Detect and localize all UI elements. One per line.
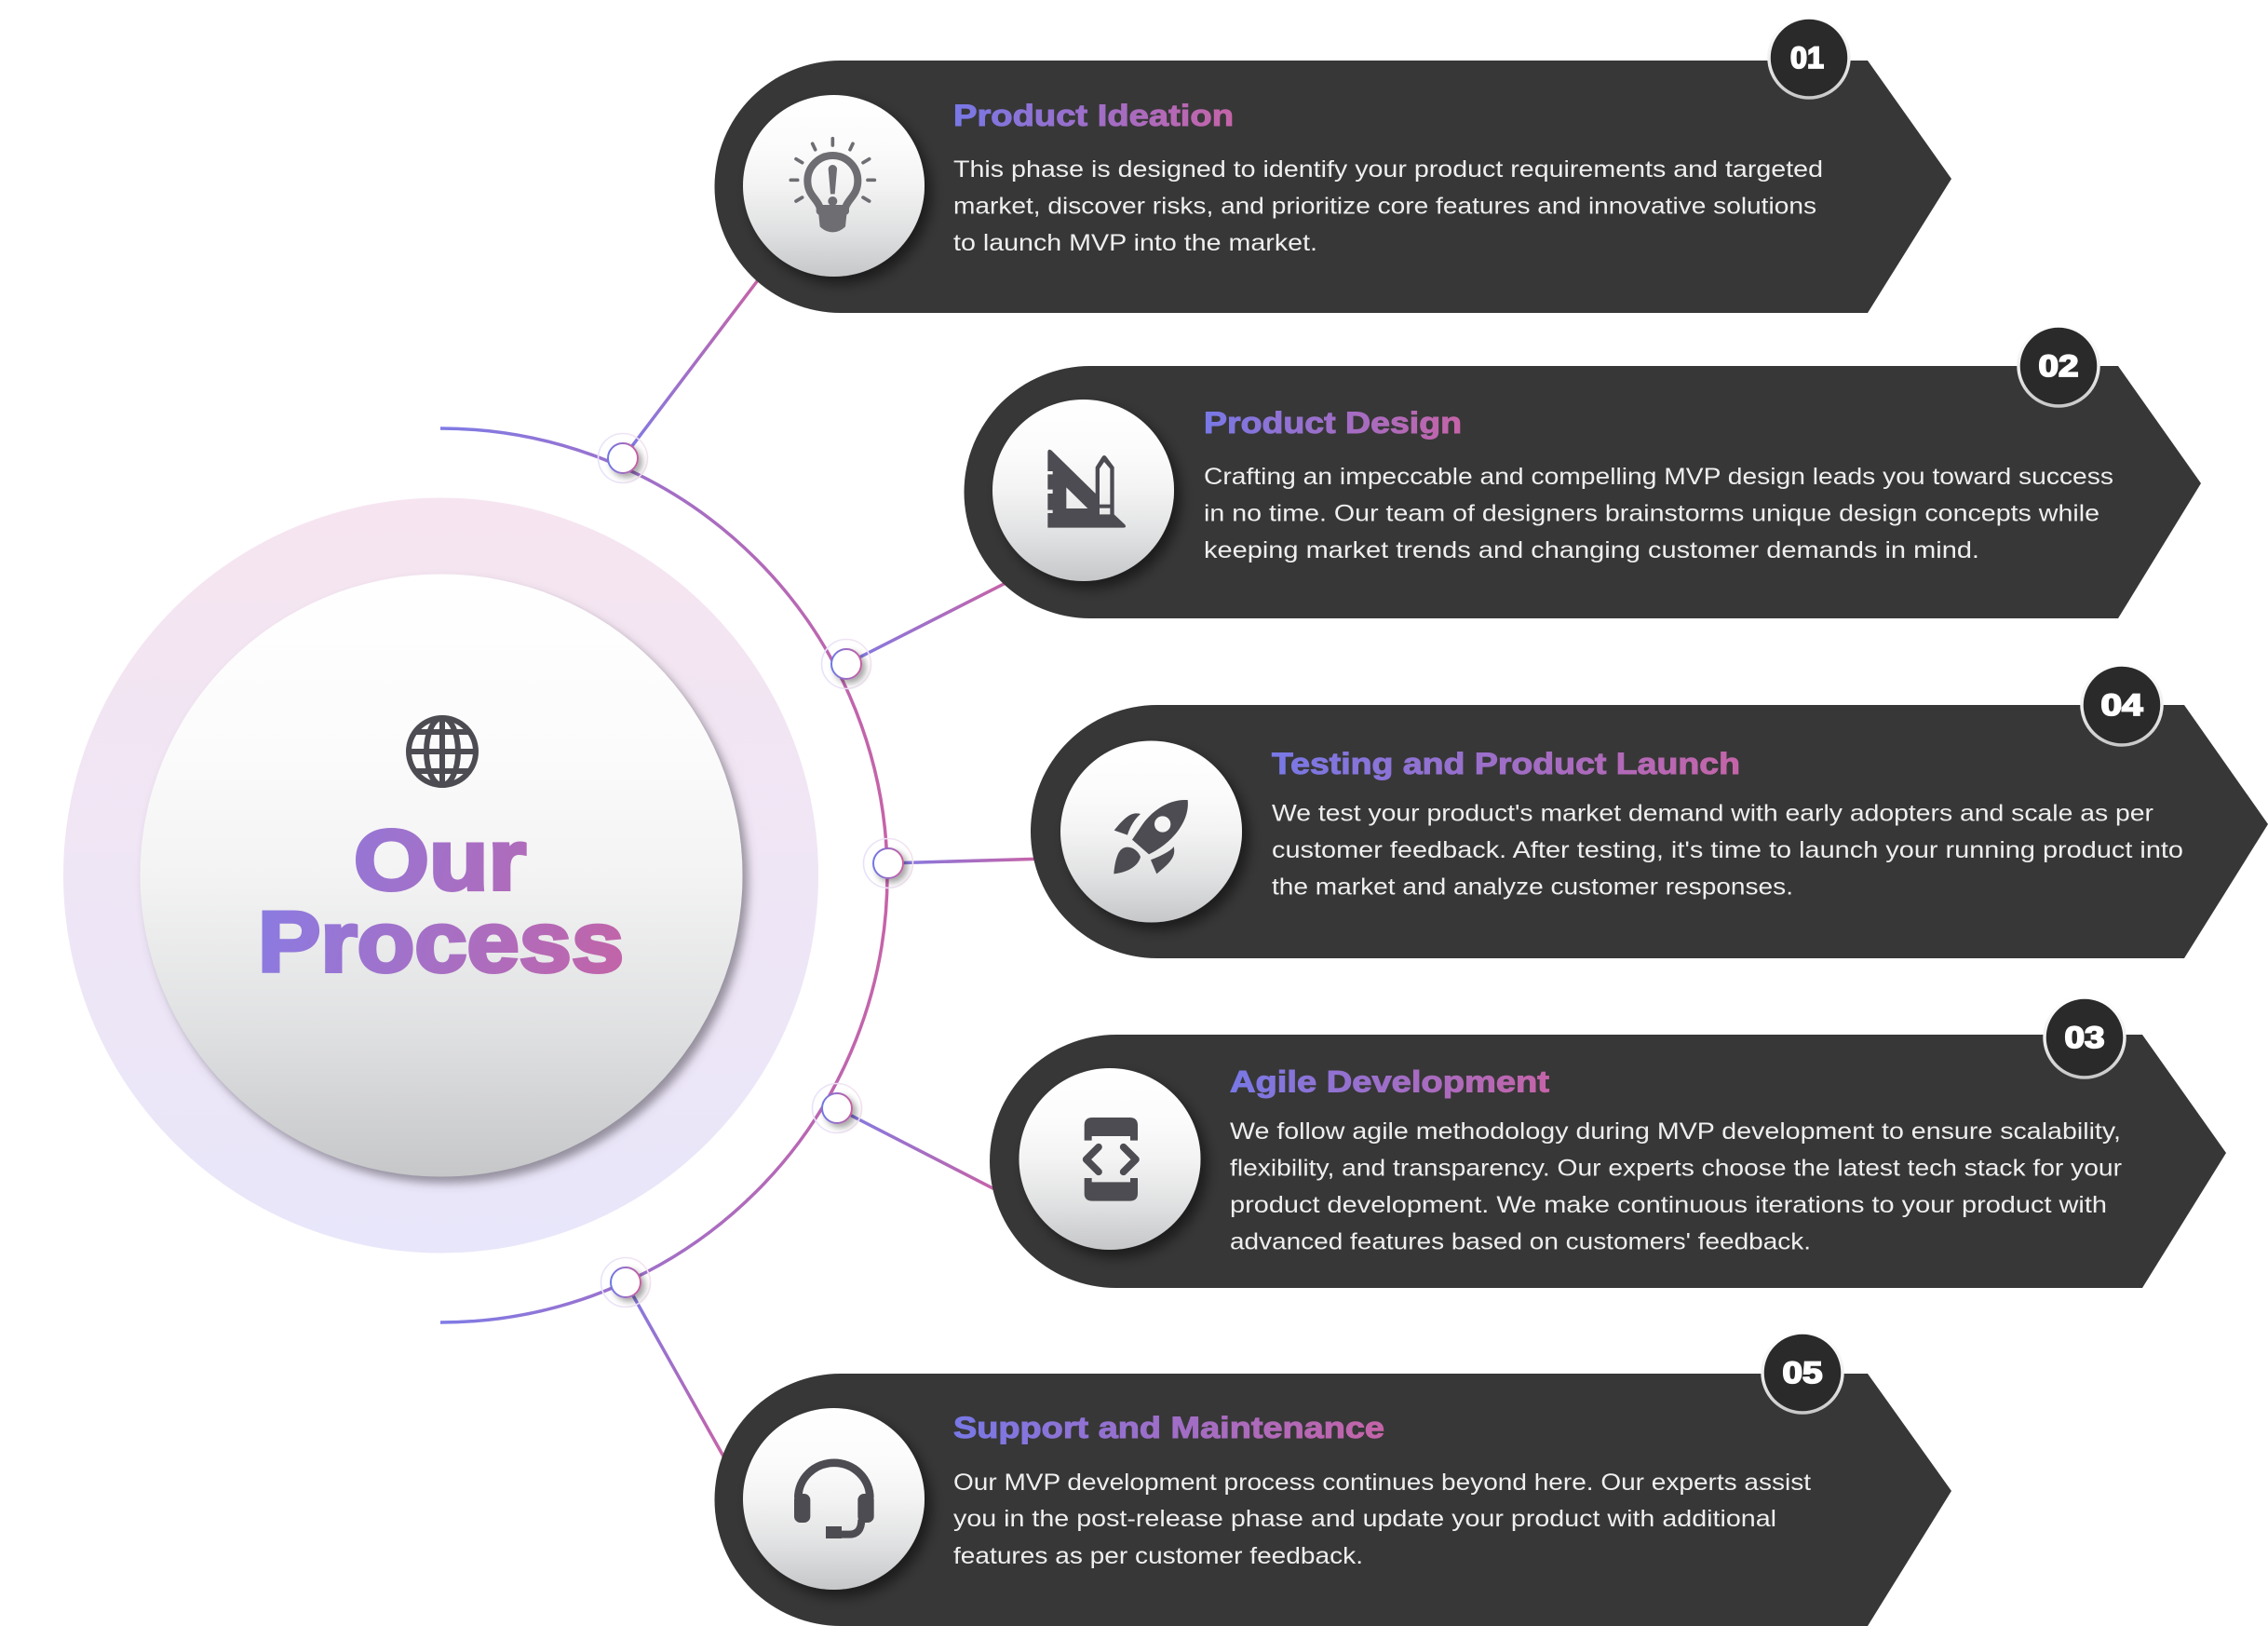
central circle: outer halo: [63, 497, 818, 1253]
heading: Our Process: [258, 813, 624, 990]
panel: Testing and Product Launch: [1031, 665, 2268, 958]
node 3: [864, 838, 912, 888]
description: product development. We make continuous iterations to your product with: [1230, 1192, 2107, 1218]
description: We test your product's market demand with early adopters and scale as per: [1272, 801, 2153, 827]
description: [953, 1470, 1811, 1569]
badge 03: 03: [2065, 1021, 2104, 1054]
icon: mobile code: [1085, 1118, 1138, 1201]
description: This phase is designed to identify your product requirements and targeted: [953, 156, 1823, 183]
title: Agile Development: [1230, 1065, 1549, 1099]
heading: Our Process: Our: [354, 813, 526, 908]
banner shape: [715, 61, 1951, 313]
connector: node 3 to Testing and Product Launch: [888, 859, 1047, 863]
description: in no time. Our team of designers brainstorms unique design concepts while: [1204, 501, 2099, 527]
badge 03: [2045, 997, 2125, 1077]
central circle: inner disc: [140, 574, 743, 1177]
icon disc: [743, 95, 925, 277]
icon: globe: [409, 718, 476, 785]
panel: Agile Development: [990, 997, 2226, 1288]
icon disc: [743, 1408, 925, 1590]
description: [1204, 464, 2113, 563]
banner shape: [1031, 705, 2268, 958]
description: flexibility, and transparency. Our experts choose the latest tech stack for your: [1230, 1155, 2122, 1181]
node 2: [821, 639, 871, 689]
banner shape: [990, 1035, 2226, 1288]
badge 02: 02: [2039, 349, 2078, 383]
description: [953, 156, 1823, 256]
timeline arc: [440, 428, 887, 1322]
badge 02: [2018, 326, 2099, 406]
node 5: [601, 1257, 650, 1308]
description: [1230, 1118, 2122, 1255]
icon disc: [992, 400, 1174, 581]
connector: node 2 to Product Design: [846, 578, 1015, 664]
node 1: [598, 434, 648, 482]
description: keeping market trends and changing customer demands in mind.: [1204, 537, 1979, 563]
badge 05: [1762, 1333, 1843, 1413]
icon: set square and pencil: [1047, 450, 1126, 528]
icon: headset: [794, 1463, 874, 1538]
icon: rocket: [1114, 800, 1188, 874]
description: features as per customer feedback.: [953, 1543, 1363, 1569]
node 4: [812, 1084, 862, 1132]
panel: Product Design: [965, 326, 2201, 618]
description: We follow agile methodology during MVP development to ensure scalability,: [1230, 1118, 2121, 1145]
heading: Our Process: Process: [258, 895, 624, 990]
badge 01: 01: [1790, 41, 1824, 75]
description: to launch MVP into the market.: [953, 230, 1317, 256]
icon disc: [1060, 741, 1242, 922]
panel: Support and Maintenance: [715, 1333, 1951, 1626]
badge 04: 04: [2100, 688, 2143, 722]
icon: light bulb: [790, 139, 874, 232]
description: market, discover risks, and prioritize core features and innovative solutions: [953, 194, 1816, 220]
panel: Product Ideation: [715, 18, 1951, 313]
banner shape: [965, 366, 2201, 618]
icon disc: [1019, 1068, 1201, 1250]
badge 01: [1769, 18, 1849, 98]
connector: node 5 to Support and Maintenance: [626, 1282, 731, 1470]
description: Our MVP development process continues beyond here. Our experts assist: [953, 1470, 1811, 1496]
description: advanced features based on customers' feedback.: [1230, 1229, 1811, 1255]
description: you in the post-release phase and update your product with additional: [953, 1506, 1776, 1532]
banner shape: [715, 1374, 1951, 1626]
title: Support and Maintenance: [953, 1411, 1384, 1444]
description: customer feedback. After testing, it's time to launch your running product into: [1272, 837, 2183, 863]
title: Testing and Product Launch: [1272, 747, 1740, 780]
badge 05: 05: [1782, 1356, 1823, 1389]
connector: node 4 to Agile Development: [837, 1108, 1006, 1195]
title: Product Ideation: [953, 99, 1234, 132]
description: Crafting an impeccable and compelling MVP design leads you toward success: [1204, 464, 2113, 490]
badge 04: [2082, 665, 2162, 745]
description: the market and analyze customer responses.: [1272, 874, 1793, 900]
description: [1272, 801, 2183, 900]
title: Product Design: [1204, 406, 1462, 440]
connector: node 1 to Product Ideation: [623, 273, 763, 458]
